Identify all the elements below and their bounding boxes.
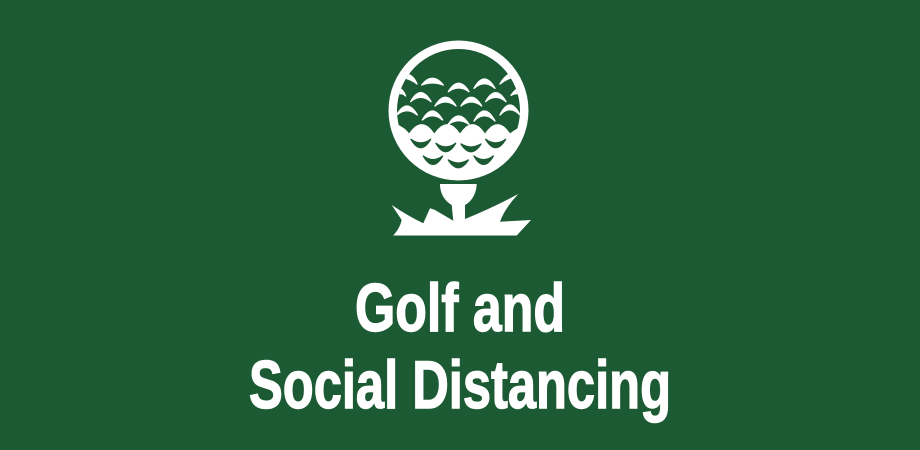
- dimples in upper half: [397, 73, 520, 124]
- dimples in lower half: [411, 139, 506, 168]
- title line 2: Social Distancing: [249, 347, 671, 423]
- title: [249, 270, 671, 423]
- title line 1: Golf and: [355, 270, 565, 346]
- banner: golf and social distancing: [250, 40, 668, 424]
- icon: golf ball on tee: [385, 30, 535, 236]
- tee and grass: [392, 184, 531, 236]
- ball upper shaded area with scalloped edge: [397, 49, 520, 168]
- golf ball: [388, 40, 528, 180]
